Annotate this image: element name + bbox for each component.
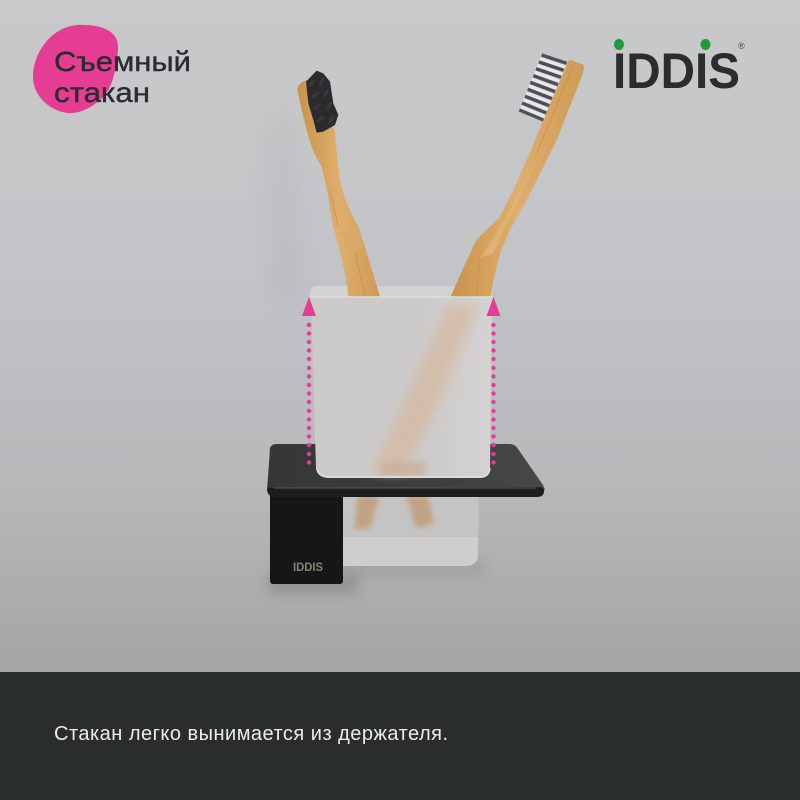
bracket logo: IDDIS <box>293 560 323 574</box>
heading line 2: стакан <box>54 77 150 108</box>
blurred toothbrush handle <box>372 305 478 472</box>
right arrow <box>486 297 500 465</box>
left toothbrush <box>297 71 380 297</box>
left arrow <box>302 297 316 465</box>
brand logo: ® <box>738 41 745 51</box>
heading: Съемный <box>54 46 191 77</box>
caption text: Стакан легко вынимается из держателя. <box>54 723 448 745</box>
brand logo: IDDIS <box>613 43 740 99</box>
drinking cup: lower part <box>327 495 479 566</box>
bristles <box>519 55 567 120</box>
bristles <box>306 71 338 133</box>
wall bracket <box>270 490 343 584</box>
caption bar <box>0 672 800 800</box>
cup base rim <box>317 468 490 477</box>
metal shelf <box>267 444 545 497</box>
right toothbrush <box>451 55 584 297</box>
pink blob <box>33 25 118 113</box>
frosted cup: front <box>311 297 492 478</box>
wall shadows <box>268 100 485 594</box>
drinking cup: back rim <box>310 286 492 298</box>
blurred lower handle <box>380 462 428 476</box>
